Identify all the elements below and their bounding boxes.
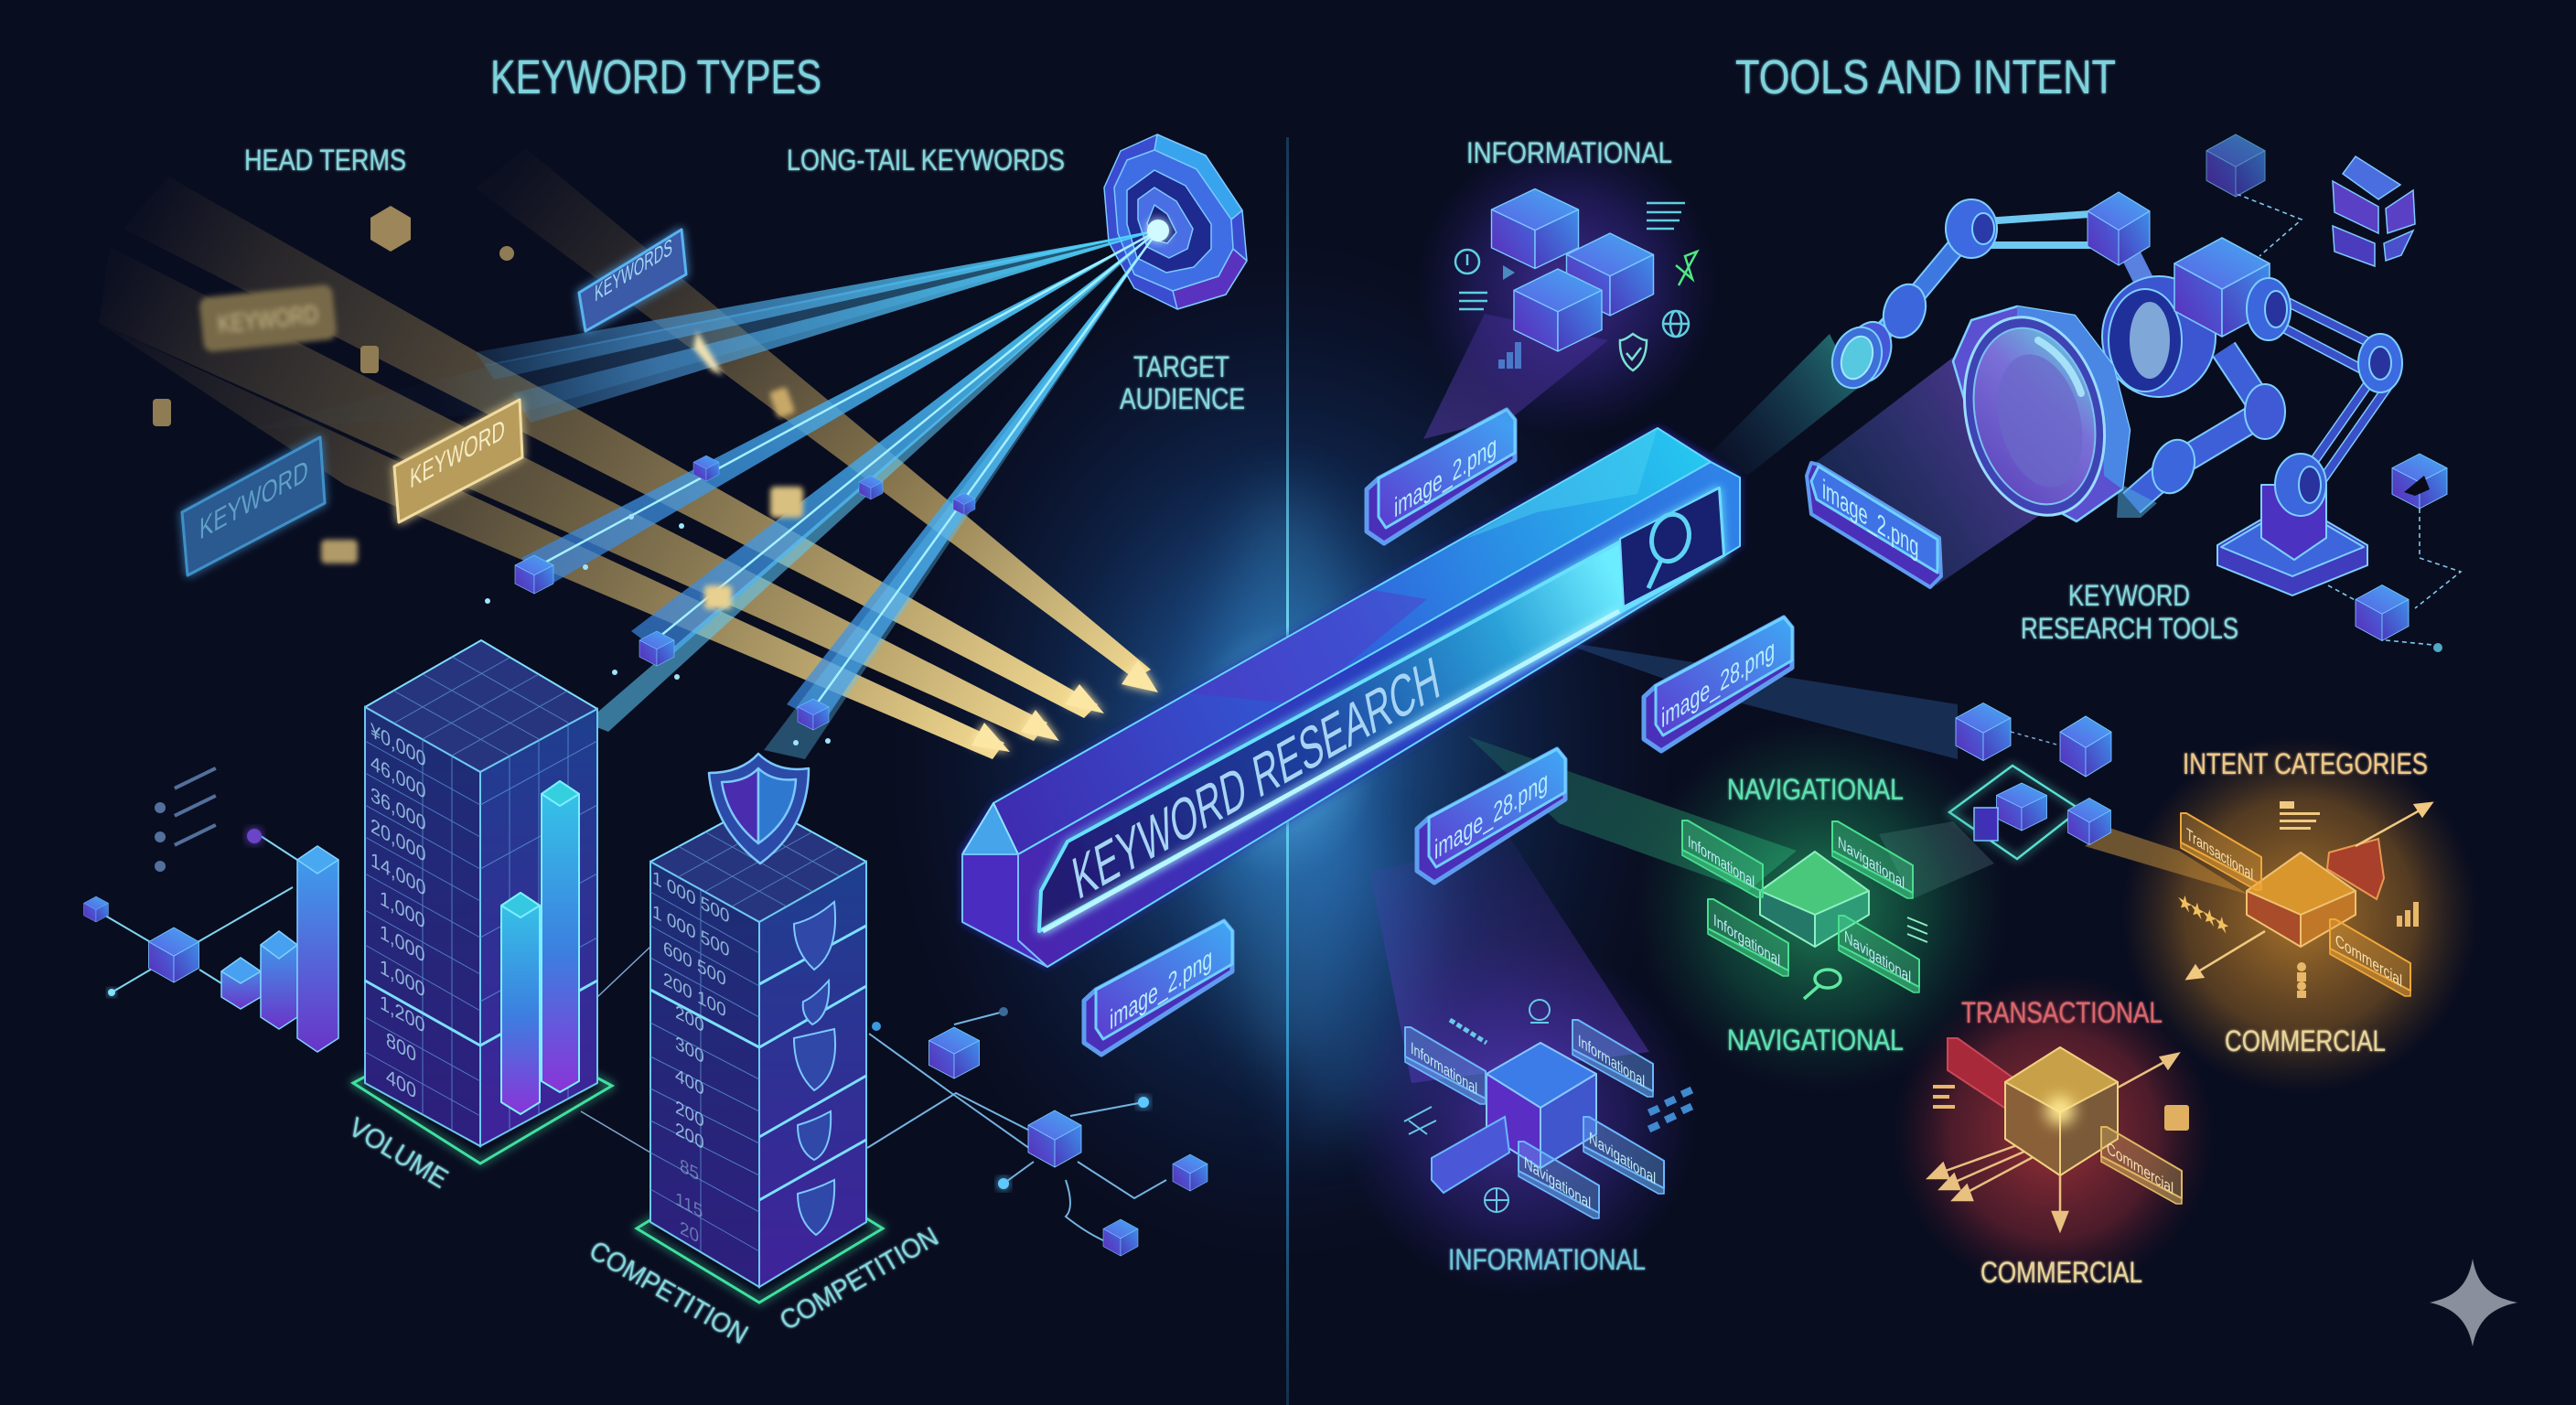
main cube [2174,238,2270,337]
pillar [2261,485,2326,560]
numbers: 1 000 500 [652,901,729,961]
label: keyword research tools [2021,579,2238,645]
axis numbers: 1,000 [380,919,425,967]
mini robots on beams [485,456,975,745]
numbers: 200 [675,1097,704,1132]
tag: image_2 bottom: image_2.png [1110,942,1212,1036]
chip: keyword gold [394,400,522,522]
axis numbers: 46,000 [370,750,426,804]
nav tags: Navigational [1838,831,1905,893]
axis numbers: ¥0,000 [370,718,426,772]
label: informational bottom: INFORMATIONAL [1448,1243,1646,1276]
base outline [353,1015,612,1164]
floating cubes and dashed links [2206,134,2461,652]
axis numbers: 14,000 [370,847,426,901]
base [2217,501,2367,595]
tag: image_2 top: image_2.png [1394,430,1497,524]
axis numbers: 36,000 [370,782,426,836]
icon: target [1104,134,1247,309]
informational cluster top [1416,135,1718,437]
list icon [1933,1085,1955,1109]
navigational cluster [1633,718,2008,1093]
bars inside tower [501,781,579,1114]
label: informational: INFORMATIONAL [1466,136,1672,169]
intent tags: Transactional [2186,823,2253,885]
cube [1760,852,1869,947]
keyword chips [182,230,686,575]
axis numbers: 800 [386,1027,416,1067]
connector lines [581,947,650,1153]
tag: image_28 lower: image_28.png [1434,766,1548,866]
icons [1455,203,1697,370]
intent categories cluster [2121,736,2478,1093]
chip: keywords blue: KEYWORDS [595,233,672,307]
axis numbers [370,718,426,1103]
chip: keyword blue [182,437,325,575]
stars: ★★★★ [2177,887,2229,940]
label: navigational top: NAVIGATIONAL [1727,773,1904,806]
people icon [2297,962,2306,998]
numbers: 400 [675,1065,704,1100]
numbers: 85 [680,1155,699,1185]
informational cluster bottom [1341,938,1698,1295]
red tag behind [2327,839,2384,899]
title: keyword types: KEYWORD TYPES [490,51,821,104]
bottom tags [1405,1020,1664,1218]
axis numbers: 20,000 [370,813,426,867]
front face [1018,462,1740,967]
nav tags: Informational [1688,831,1755,892]
filename tags [1084,410,1941,1055]
blue long-tail beams [247,220,1169,759]
icon: green magnifier [1804,970,1841,999]
numbers: 115 [675,1188,703,1223]
transactional cluster [1894,974,2214,1294]
right network [867,1007,1208,1256]
fragmented cube [2333,156,2415,266]
chip: keyword blurred gold [199,284,338,352]
gold head-term beams [99,148,1151,759]
volume tower [353,640,612,1164]
competition tower [637,754,883,1303]
label: head terms: HEAD TERMS [244,144,406,177]
label: commercial right: COMMERCIAL [2225,1024,2386,1057]
chip: keywords blue [579,230,686,331]
icon: sparkle watermark [2430,1259,2517,1346]
top face [993,428,1711,854]
axis numbers: 400 [386,1064,416,1103]
label: keyword research tools: RESEARCH TOOLS [2021,612,2238,645]
numbers: 200 [675,1119,704,1154]
central search bar [962,428,1740,967]
central glow [887,238,1674,1262]
list icon [2280,801,2320,830]
tag: image_28 middle: image_28.png [1661,634,1775,735]
icons [1404,1000,1550,1212]
label: volume: VOLUME [343,1112,453,1195]
icon: magnifier [1647,510,1694,588]
label: target audience: TARGET [1133,350,1229,383]
center network loop [1949,702,2111,859]
end cap [962,803,1018,854]
nav tags: Navigational [1844,926,1911,987]
label: navigational bottom: NAVIGATIONAL [1727,1024,1904,1056]
left network chart [84,767,338,1052]
small lens [1837,316,1899,389]
barrel [2102,276,2216,397]
numbers: 1 000 500 [652,867,729,928]
tag: image_2 bottom [1084,921,1232,1055]
beams from tags [1370,314,2249,1083]
numbers: 300 [675,1033,704,1068]
numbers: 200 100 [663,969,726,1022]
tag: image_2 right: image_2.png [1822,474,1918,564]
chip: keyword blurred gold: KEYWORD [217,300,319,338]
right arm rods [1859,213,2389,503]
dark mark on cube [2404,476,2430,496]
arrows [2187,803,2431,979]
label: long-tail keywords: LONG-TAIL KEYWORDS [787,144,1065,177]
bottom tags: Informational [1411,1037,1477,1099]
icon: large shield [709,754,809,863]
bars icon [2397,902,2419,927]
nav tags: Inforgational [1713,909,1780,971]
nav tags [1682,820,1919,992]
label: keyword research tools: KEYWORD [2068,579,2190,612]
tag: image_2 top [1367,410,1515,543]
joint [1946,199,1997,258]
intent tags [2181,813,2410,996]
title: tools and intent: TOOLS AND INTENT [1735,51,2116,104]
label: target audience: AUDIENCE [1120,382,1245,415]
center divider line [1286,137,1289,1405]
numbers: 20 [680,1217,699,1248]
main lens [1953,306,2130,521]
chip: keyword gold: KEYWORD [410,414,505,495]
axis numbers: 1,000 [380,885,425,933]
bag icon [2164,1105,2189,1131]
label: intent categories: INTENT CATEGORIES [2183,747,2428,780]
floating gold cubes [153,206,803,609]
numbers: 200 [675,1002,704,1037]
search button [1620,488,1723,606]
label: transactional: TRANSACTIONAL [1961,996,2163,1029]
chip: keyword blue: KEYWORD [199,453,308,546]
bottom tags: Navigational [1524,1152,1591,1213]
intent tags: Commercial [2335,929,2402,991]
gold arrowheads [971,660,1158,752]
tag: image_28 middle [1644,617,1792,751]
bottom tags: Informational [1578,1030,1645,1091]
label: target audience [1120,350,1245,415]
cube [2247,853,2356,947]
icon: face shields [794,902,835,1235]
numbers [652,867,729,1248]
axis numbers: 1,200 [380,990,425,1037]
numbers: 600 500 [663,938,726,991]
axis numbers: 1,000 [380,954,425,1002]
input panel [1039,488,1723,931]
cube [1487,1043,1596,1168]
gem cube [2005,1047,2118,1175]
tool tip [2145,434,2202,499]
label: competition left: COMPETITION [584,1235,753,1350]
tag: image_28 lower [1417,749,1565,883]
robot arm [1824,192,2402,595]
bottom tags: Navigational [1589,1127,1656,1188]
commercial tag: Commercial [2107,1137,2174,1198]
bar title: KEYWORD RESEARCH [1068,644,1444,913]
elbow joints [2358,334,2402,392]
upper cube [2088,192,2150,265]
label: commercial bottom: COMMERCIAL [1980,1256,2142,1289]
label: competition right: COMPETITION [775,1221,944,1336]
